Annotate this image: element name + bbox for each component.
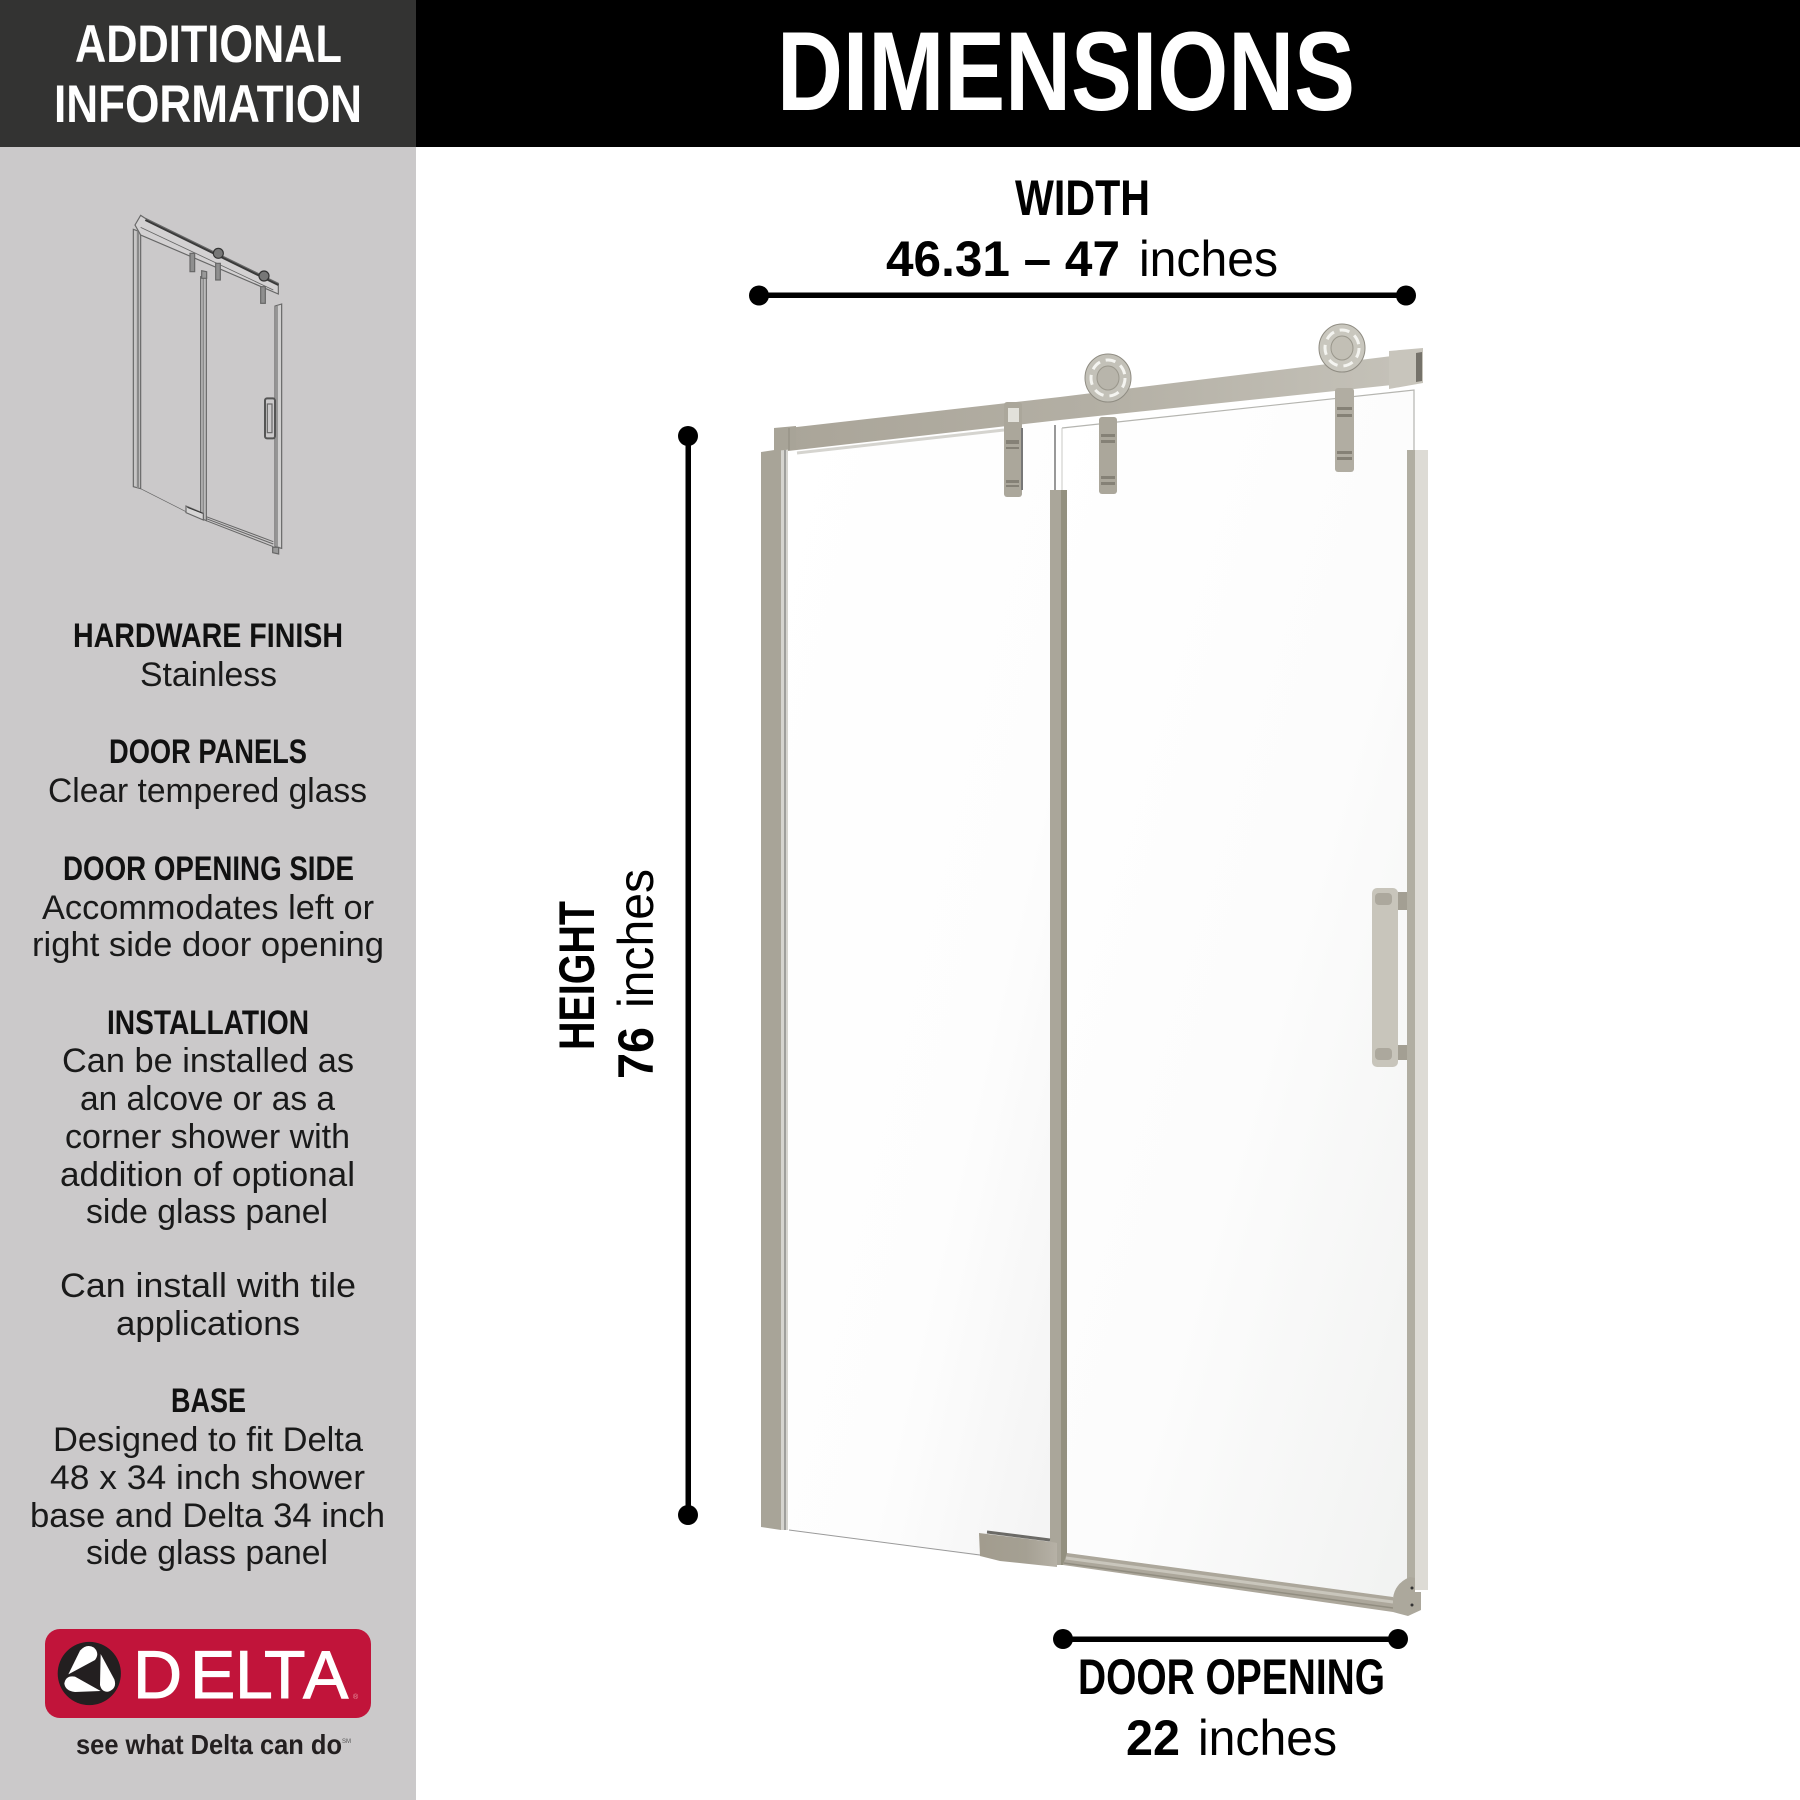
dimension: width label: 46.31 – 47 <box>886 231 1120 287</box>
text block: installation: an alcove or as a <box>80 1080 335 1118</box>
dimension: door opening label: DOOR OPENING <box>1078 1649 1385 1705</box>
text block: door panels <box>48 733 367 810</box>
text block: base <box>30 1382 385 1572</box>
text block: base: 48 x 34 inch shower <box>50 1459 365 1497</box>
central door edge <box>1050 490 1067 1565</box>
text block: installation: addition of optional <box>60 1156 355 1194</box>
track end shoe <box>1393 1577 1421 1616</box>
icon: shower door line drawing <box>133 215 282 554</box>
illustration: sliding shower door <box>761 324 1428 1616</box>
dimension: width label: WIDTH <box>1015 170 1150 226</box>
panel: additional information sidebar <box>0 0 416 1800</box>
logo: delta: ® <box>353 1693 359 1701</box>
sidebar heading: additional information <box>0 0 416 147</box>
sidebar heading: additional information: ADDITIONAL <box>75 15 342 74</box>
top rail <box>788 356 1392 451</box>
rail end caps <box>774 348 1423 451</box>
logo: delta: DELTA <box>133 1637 349 1713</box>
text block: door opening side: Accommodates left or <box>42 889 374 927</box>
title: dimensions <box>416 0 1800 147</box>
hanger bracket one <box>1004 402 1023 497</box>
text block: base: Designed to fit Delta <box>53 1421 363 1459</box>
logo: delta: see what Delta can do <box>76 1729 342 1760</box>
bottom track <box>1063 1553 1393 1612</box>
left wall jamb <box>761 449 788 1530</box>
text block: installation: INSTALLATION <box>107 1004 309 1042</box>
logo: delta: SM <box>342 1739 351 1745</box>
hanger bracket three <box>1335 388 1354 472</box>
text block: installation: applications <box>116 1305 300 1343</box>
text block: base: side glass panel <box>86 1534 328 1572</box>
title: dimensions: DIMENSIONS <box>777 9 1355 134</box>
text block: installation: corner shower with <box>65 1118 350 1156</box>
dimension: door opening label <box>1078 1649 1385 1766</box>
arrow: width measure line <box>749 286 1416 306</box>
text block: door panels: DOOR PANELS <box>109 733 307 771</box>
text block: installation <box>60 1004 356 1343</box>
arrow: door opening measure line <box>1053 1629 1408 1649</box>
floor guide <box>979 1532 1057 1567</box>
fixed glass panel <box>787 422 1052 1561</box>
text block: base: base and Delta 34 inch <box>30 1497 385 1535</box>
arrow: height measure line <box>678 426 698 1525</box>
text block: door opening side <box>32 850 384 964</box>
dimension: height label: 76 <box>608 1027 664 1079</box>
roller two <box>1319 324 1365 372</box>
text block: hardware finish: HARDWARE FINISH <box>73 617 343 655</box>
right edge jamb <box>1407 450 1428 1590</box>
logo: delta <box>45 1629 371 1760</box>
sidebar heading: additional information: INFORMATION <box>54 75 362 134</box>
text block: hardware finish <box>73 617 343 694</box>
dimension: door opening label: 22 <box>1126 1710 1180 1766</box>
dimension: door opening label: inches <box>1198 1710 1337 1766</box>
door handle <box>1372 888 1407 1067</box>
text block: installation: side glass panel <box>86 1193 328 1231</box>
text block: base: BASE <box>171 1382 246 1420</box>
hanger bracket two <box>1099 417 1117 494</box>
dimension: height label: HEIGHT <box>549 901 605 1050</box>
text block: installation: Can be installed as <box>62 1042 354 1080</box>
sliding glass panel <box>1055 390 1414 1600</box>
dimension: width label: inches <box>1139 231 1278 287</box>
text block: installation: Can install with tile <box>60 1267 356 1305</box>
dimension: height label: inches <box>608 869 664 1008</box>
text block: door opening side: DOOR OPENING SIDE <box>63 850 354 888</box>
roller one <box>1085 354 1131 402</box>
text block: hardware finish: Stainless <box>140 656 277 694</box>
text block: door panels: Clear tempered glass <box>48 772 367 810</box>
dimension: width label <box>886 170 1278 287</box>
dimension: height label <box>549 869 664 1079</box>
text block: door opening side: right side door opening <box>32 926 384 964</box>
